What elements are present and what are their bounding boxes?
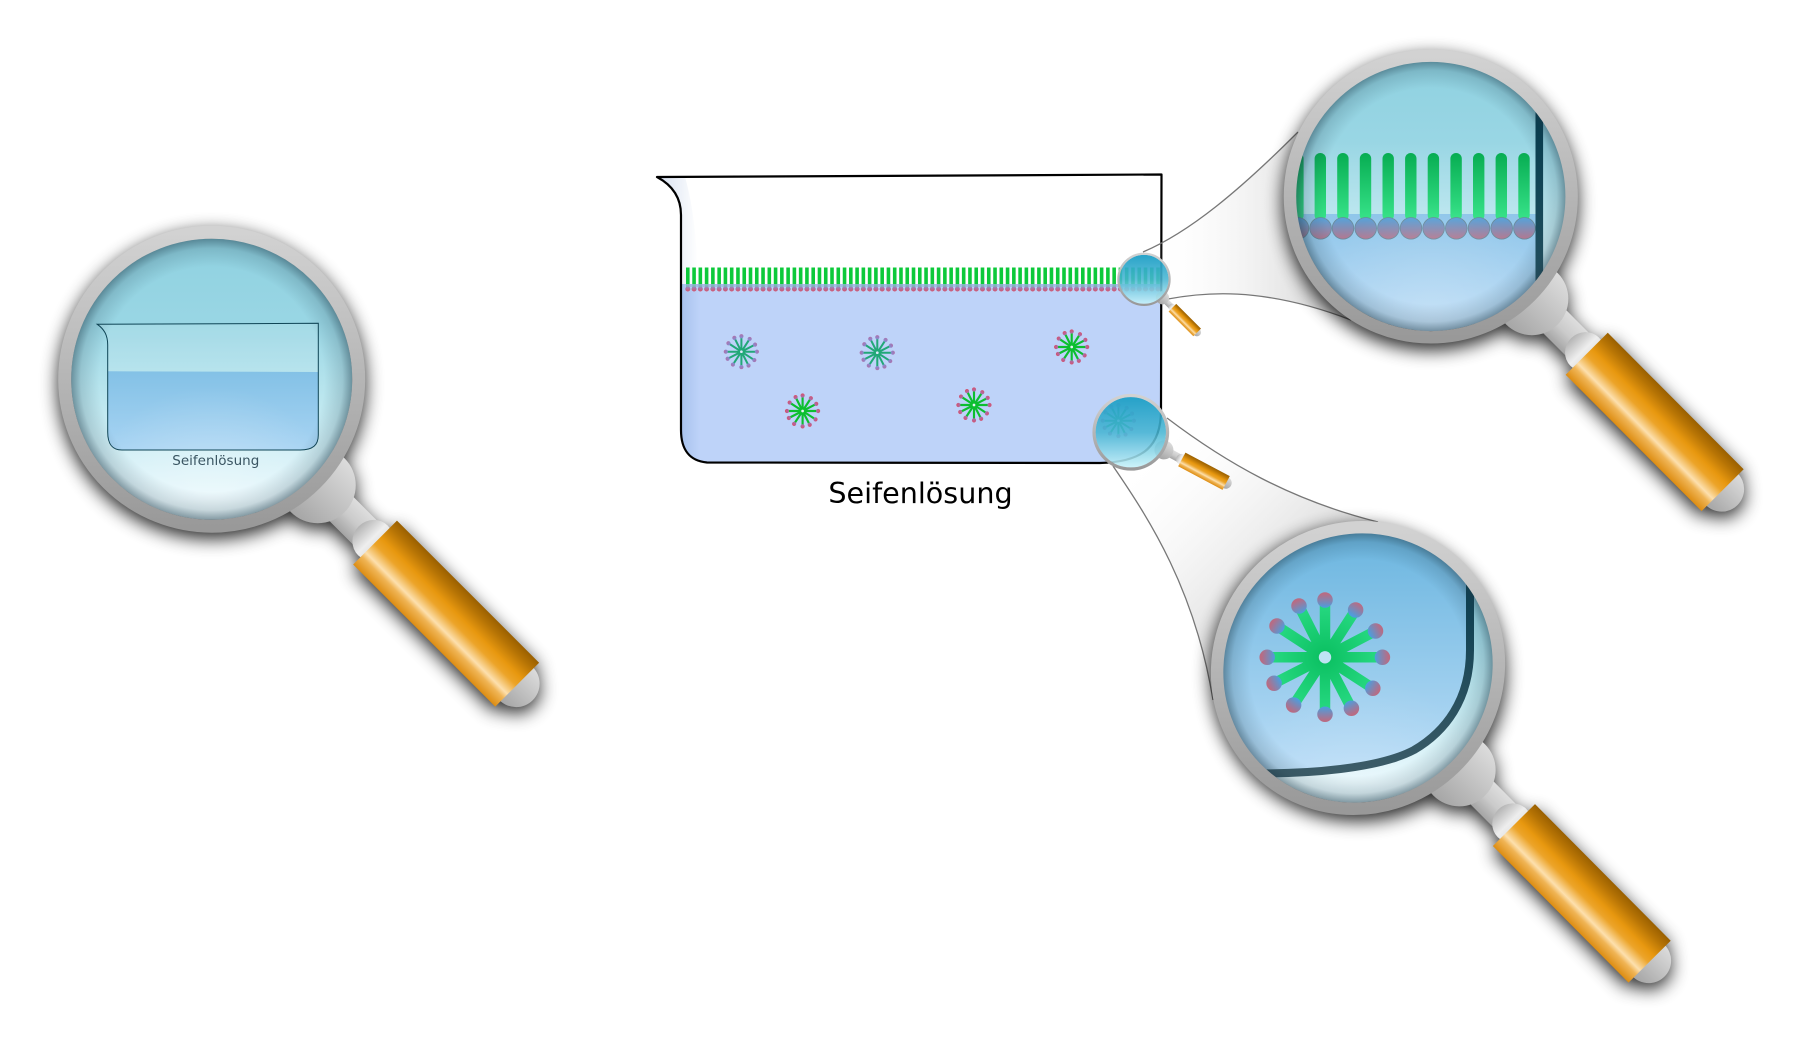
beaker glass fill <box>657 174 1162 463</box>
lens content <box>1287 60 1566 340</box>
surfactant heads <box>1287 218 1535 239</box>
spout shading <box>657 177 698 284</box>
mini beaker outline <box>97 323 318 450</box>
liquid <box>675 284 1165 469</box>
shadow <box>1223 0 1803 615</box>
lens edge shading <box>1296 61 1566 331</box>
surfactant layer tails <box>686 268 1162 288</box>
surfactant tails <box>1292 153 1530 221</box>
handle <box>1480 247 1763 531</box>
lens content <box>70 238 354 522</box>
lens content <box>1223 533 1493 803</box>
large magnifier: left, whole beaker <box>44 217 554 727</box>
ring <box>1290 56 1572 337</box>
large magnifier: bottom right, micelle <box>1196 512 1685 1003</box>
large magnifier: top right, surfactant layer <box>1269 42 1758 532</box>
label: Seifenlösung: Seifenlösung <box>828 476 1013 510</box>
liquid <box>1290 214 1536 334</box>
lens glow <box>1329 751 1378 766</box>
handle <box>264 432 560 727</box>
small magnifier: surface <box>1118 254 1205 340</box>
zoom cone lines: micelle <box>1113 418 1378 700</box>
lens glow <box>146 416 278 514</box>
shadow <box>0 168 641 815</box>
micelle <box>1267 600 1382 714</box>
surfactant layer band <box>686 284 1160 287</box>
micelles in solution <box>726 332 1134 436</box>
lens edge shading <box>1219 532 1497 803</box>
handle <box>1408 718 1690 1002</box>
zoom cone: surface <box>1143 132 1351 320</box>
lens glow <box>1376 235 1486 328</box>
surfactant layer heads <box>688 286 1160 292</box>
shadow <box>1150 466 1769 1041</box>
ring <box>1213 527 1503 809</box>
liquid <box>1224 534 1466 770</box>
mini label: Seifenlösung <box>172 453 259 469</box>
lens edge shading <box>71 238 352 520</box>
beaker wall <box>1266 584 1474 778</box>
small magnifier: micelle <box>1094 396 1235 494</box>
mini beaker liquid <box>108 371 318 450</box>
beaker wall <box>1536 112 1544 281</box>
ring <box>65 232 359 526</box>
mini beaker air <box>100 324 318 356</box>
beaker outline <box>657 174 1162 463</box>
zoom cone: micelle <box>1113 418 1378 700</box>
zoom cone lines: surface <box>1143 132 1351 320</box>
beaker with soap solution <box>657 174 1165 469</box>
